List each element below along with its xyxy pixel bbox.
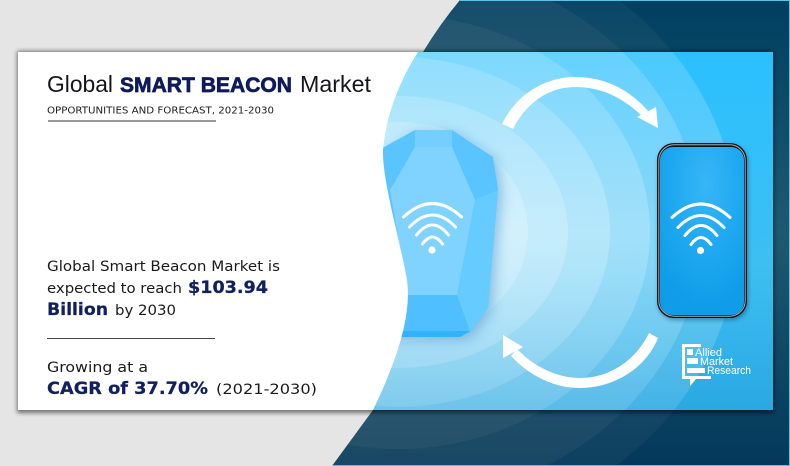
CAGR text: CAGR of 37.70% <box>47 379 208 398</box>
icon: beacon device <box>375 130 502 340</box>
logo: Allied Market Research: Market <box>700 356 733 368</box>
title <box>47 71 372 97</box>
text divider <box>47 338 215 339</box>
title: Global <box>47 71 113 97</box>
icon: wifi on beacon <box>404 204 462 254</box>
CAGR text: Growing at a <box>47 359 148 376</box>
subtitle: OPPORTUNITIES AND FORECAST, 2021-2030 <box>47 106 274 116</box>
panel shadow <box>17 51 774 413</box>
market size text: by 2030 <box>115 302 176 319</box>
market size text: $103.94 <box>188 278 268 297</box>
blue panel <box>373 52 773 410</box>
market size text: expected to reach <box>47 280 182 297</box>
market size text: Global Smart Beacon Market is <box>47 258 280 275</box>
subtitle underline <box>48 120 216 122</box>
market size text: Billion <box>47 300 108 319</box>
CAGR text <box>47 359 317 398</box>
title: Market <box>300 71 372 97</box>
logo: Allied Market Research: Research <box>707 365 751 377</box>
CAGR text: (2021-2030) <box>216 381 317 398</box>
arrow: top, beacon to phone <box>502 77 658 129</box>
logo: Allied Market Research: Allied <box>695 347 722 359</box>
icon: smartphone <box>657 143 748 320</box>
dark curved backdrop with rings <box>332 0 790 466</box>
icon: wifi on phone <box>672 204 730 254</box>
arrow: bottom, phone to beacon <box>503 333 658 388</box>
logo: Allied Market Research <box>682 344 751 386</box>
signal rings <box>373 52 724 410</box>
white text panel <box>18 52 418 410</box>
market size text <box>47 258 280 319</box>
title: SMART BEACON <box>120 73 292 97</box>
